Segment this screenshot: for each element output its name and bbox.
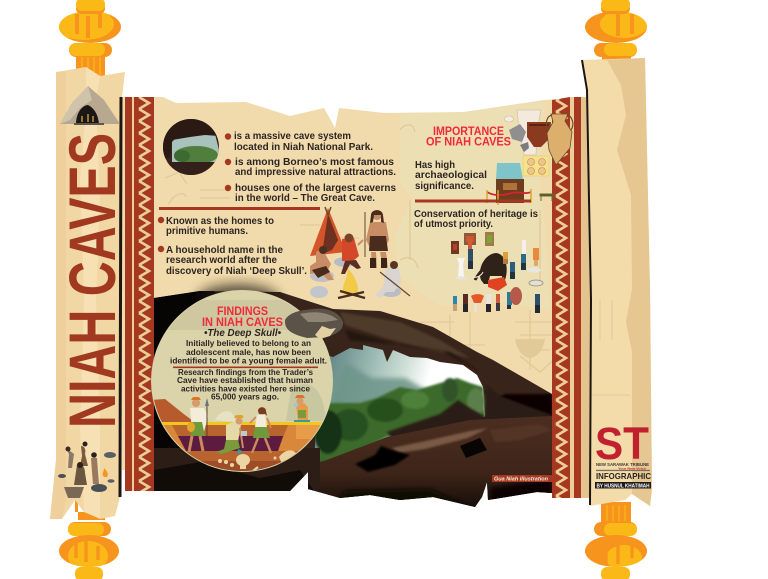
text block: cave facts: located in Niah National Park. xyxy=(234,142,373,153)
text block: primitive humans: A household name in the xyxy=(166,245,283,256)
cave floor xyxy=(300,416,552,510)
text block: trader's cave findings: Research findings from the Trader’s xyxy=(178,367,313,377)
heading: findings in Niah Caves: FINDINGS xyxy=(217,306,268,318)
text block: primitive humans: Known as the homes to xyxy=(166,216,274,227)
text block: trader's cave findings: activities have existed here since xyxy=(181,384,310,394)
text block: cave facts: houses one of the largest caverns xyxy=(235,183,396,194)
illustration: museum visitors and mammoth xyxy=(451,232,543,313)
distant hills xyxy=(331,364,426,404)
text block: deep skull findings: adolescent male, has now been xyxy=(186,347,311,357)
top-left scroll finial xyxy=(59,0,121,76)
logo: New Sarawak Tribune infographic credit: ST xyxy=(595,418,649,469)
caption: Gua Niah illustration: Gua Niah illustration xyxy=(494,477,549,483)
text block: primitive humans xyxy=(158,216,307,277)
title: Niah Caves: NIAH CAVES xyxy=(55,133,129,428)
bottom-right scroll finial xyxy=(585,502,647,579)
text block: primitive humans: primitive humans. xyxy=(166,226,248,237)
main parchment panel xyxy=(122,97,590,470)
text block: conservation: Conservation of heritage is xyxy=(414,209,538,220)
text block: cave facts: is among Borneo’s most famous xyxy=(235,157,394,168)
left scroll bar xyxy=(50,67,125,519)
photo: thumbnail of cave mouth xyxy=(163,119,222,176)
panel: findings circle xyxy=(151,290,333,472)
heading: findings in Niah Caves: IN NIAH CAVES xyxy=(202,317,283,329)
crouching digger xyxy=(294,395,310,421)
text block: conservation: of utmost priority. xyxy=(414,219,493,230)
text block: cave facts: is a massive cave system xyxy=(234,131,351,142)
logo: New Sarawak Tribune infographic credit: INFOGRAPHIC xyxy=(596,471,651,481)
left decorative band xyxy=(125,97,154,491)
excavation scene xyxy=(154,300,326,471)
text block: conservation xyxy=(414,209,538,230)
heading: findings in Niah Caves xyxy=(202,306,283,329)
kneeling digger xyxy=(216,415,247,454)
opening with sky xyxy=(315,345,485,460)
icon: deep skull fossil xyxy=(285,309,343,339)
text block: cave facts: and impressive natural attractions. xyxy=(235,167,396,178)
subheading: the deep skull: •The Deep Skull• xyxy=(204,328,281,339)
heading: importance of Niah Caves xyxy=(426,126,511,148)
text block: archaeological significance: Has high xyxy=(415,160,455,171)
illustration: museum display case xyxy=(487,156,554,205)
text block: deep skull findings xyxy=(170,338,327,366)
text block: deep skull findings: Initially believed to belong to an xyxy=(186,338,311,348)
text block: archaeological significance: archaeological xyxy=(415,170,487,181)
icon: cave mountain xyxy=(60,86,120,124)
logo: New Sarawak Tribune infographic credit: Your New Voice xyxy=(618,466,647,470)
text block: primitive humans: discovery of Niah ‘Deep Skull’. xyxy=(166,266,307,277)
illustration: pottery artifacts xyxy=(504,110,573,165)
illustration: cave photograph xyxy=(154,285,554,510)
text block: trader's cave findings: Cave have established that human xyxy=(177,375,313,385)
logo: New Sarawak Tribune infographic credit: NEW SARAWAK TRIBUNE xyxy=(596,462,650,468)
archaeologist with spear xyxy=(187,397,209,452)
bottom-left scroll finial xyxy=(59,493,119,579)
top-right scroll finial xyxy=(585,0,648,63)
forest trees xyxy=(314,378,485,462)
text block: trader's cave findings: 65,000 years ago. xyxy=(211,392,279,402)
cave wall ledge xyxy=(386,386,552,436)
text block: cave facts: in the world – The Great Cave. xyxy=(235,193,375,204)
standing female digger xyxy=(250,407,271,453)
right decorative band xyxy=(552,97,590,498)
illustration: cave people camp xyxy=(310,207,410,298)
icon: early humans group xyxy=(58,442,116,498)
text block: archaeological significance: significance. xyxy=(415,181,474,192)
text block: trader's cave findings xyxy=(177,367,313,402)
heading: importance of Niah Caves: IMPORTANCE xyxy=(433,126,504,138)
text block: archaeological significance xyxy=(415,160,487,192)
text block: cave facts xyxy=(225,131,396,204)
logo: New Sarawak Tribune infographic credit: BY HUSNUL KHATIMAH xyxy=(596,483,650,489)
circle shadow xyxy=(198,284,278,312)
heading: importance of Niah Caves: OF NIAH CAVES xyxy=(426,136,511,148)
text block: deep skull findings: identified to be of a young female adult. xyxy=(170,356,327,366)
text block: primitive humans: research world after the xyxy=(166,255,277,266)
right scroll bar xyxy=(582,58,652,506)
